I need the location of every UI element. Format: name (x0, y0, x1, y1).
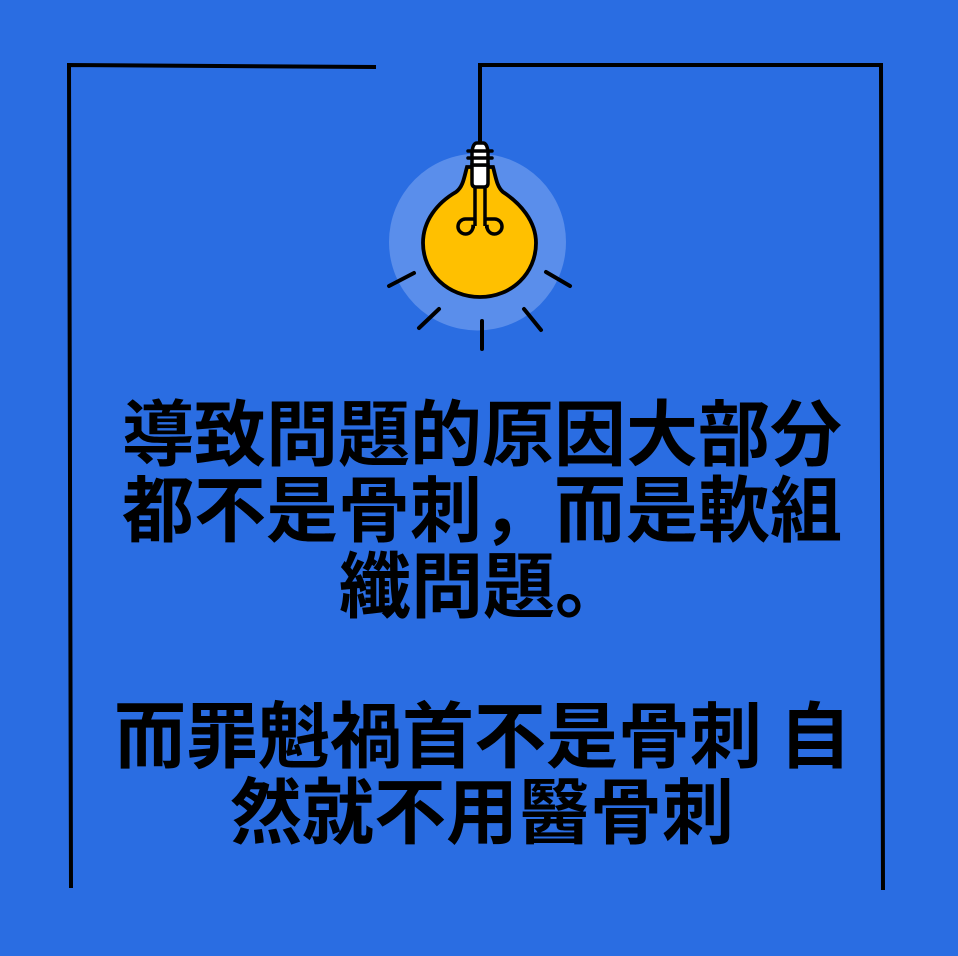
heading line 2: 都不是骨刺，而是軟組 (122, 452, 842, 557)
conclusion line 1 end: 自 (779, 678, 851, 783)
heading line 1: 導致問題的原因大部分 (122, 376, 842, 481)
conclusion line 2: 然就不用醫骨刺 (230, 754, 734, 859)
heading line 3: 纖問題。 (339, 528, 627, 633)
conclusion line 1: 而罪魁禍首不是骨刺 (114, 678, 762, 783)
